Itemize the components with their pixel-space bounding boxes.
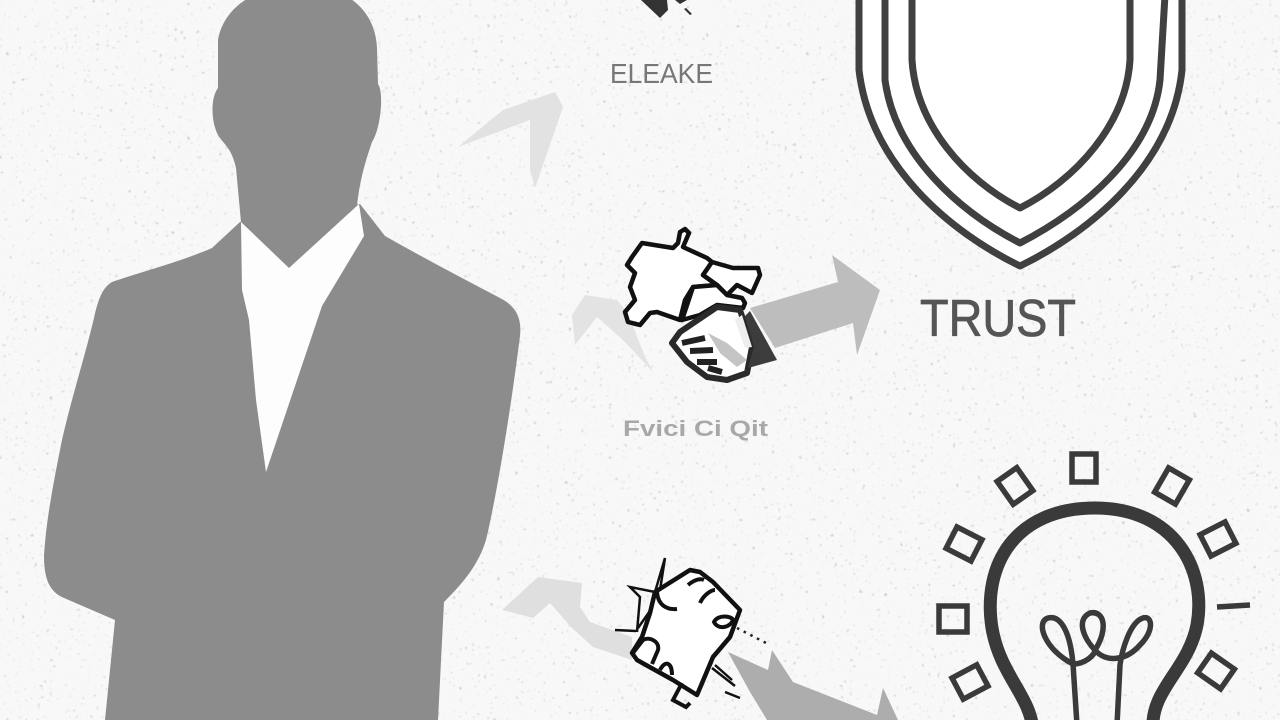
silhouette: businessman with crossed arms — [44, 0, 520, 720]
head and neck — [212, 0, 381, 268]
arrow: faint lower up-left — [502, 577, 632, 660]
label: ELEAKE: ELEAKE — [610, 58, 713, 89]
white shirt — [241, 204, 364, 472]
label: TRUST: TRUST — [920, 290, 1076, 348]
arrow: lower grey pointing right-down — [728, 650, 898, 720]
arrow: faint left up-arrow — [572, 295, 653, 372]
puzzle piece small — [703, 262, 760, 295]
icon: top cropped fragment — [641, 0, 692, 18]
arrow: large grey pointing right — [750, 255, 880, 355]
rays — [939, 454, 1250, 699]
cuff — [745, 311, 777, 368]
filament — [1042, 613, 1150, 720]
puzzle piece large — [625, 229, 717, 325]
shield icon — [859, 0, 1182, 266]
label: garbled caption: Fvici Ci Qit — [623, 416, 769, 441]
hand — [672, 307, 752, 380]
icon: sketched fist — [615, 558, 770, 707]
arrow: faint upper chevron — [458, 92, 563, 188]
icon: light bulb — [939, 454, 1250, 720]
bulb glass — [990, 508, 1199, 720]
icon: puzzle pieces and handshake — [625, 229, 777, 380]
